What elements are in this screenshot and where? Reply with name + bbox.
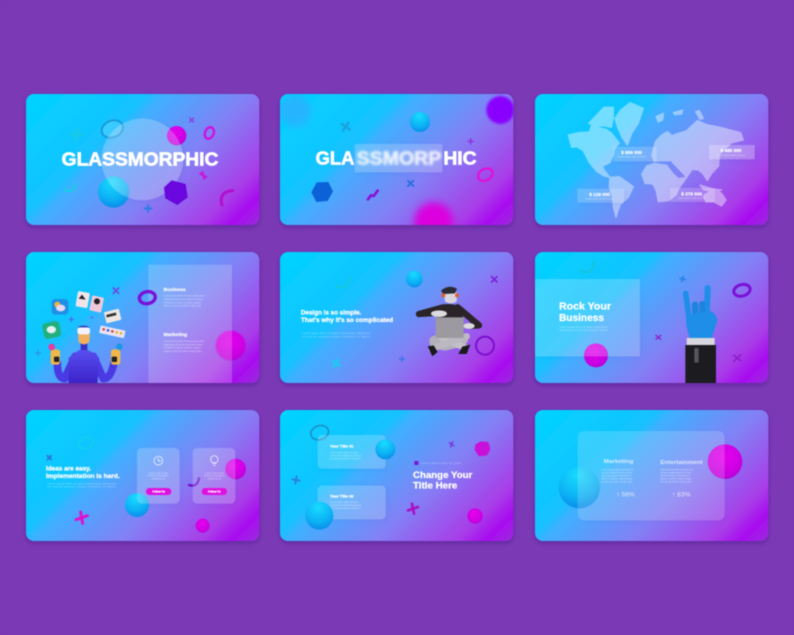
slide 8: change your title here bbox=[280, 410, 513, 541]
slide 9: marketing and entertainment stats bbox=[535, 410, 768, 541]
glass card 2: do eiusmod tempor incididunt bbox=[330, 507, 361, 510]
label: 128 000 bbox=[577, 189, 624, 203]
column: entertainment bbox=[660, 460, 703, 499]
eyebrow text: Lorem ipsum dolor sit amet bbox=[421, 462, 462, 465]
column: entertainment: labore et dolore magna aliqua bbox=[660, 477, 692, 480]
icon: magenta cross bbox=[408, 504, 418, 514]
slide 6: rock your business bbox=[535, 252, 768, 383]
glass card 2: consectetur adipiscing elit sed bbox=[330, 504, 362, 507]
glass card 2: Lorem ipsum dolor bbox=[205, 472, 224, 475]
ring top bbox=[99, 117, 126, 141]
slide background bbox=[535, 410, 768, 541]
text: business: aliqua ut enim ad minim veniam quis bbox=[164, 305, 202, 308]
icon: cyan plus bbox=[70, 128, 83, 141]
column: marketing bbox=[601, 459, 635, 499]
icon: purple square bullet bbox=[414, 461, 418, 465]
title text: GLA bbox=[316, 148, 354, 169]
icon: purple cross small bbox=[449, 442, 454, 447]
icon: cyan plus bbox=[330, 357, 342, 369]
title text: SSMORP bbox=[357, 148, 441, 169]
label: 856 000: $ 856 000 bbox=[621, 150, 642, 155]
glass card 1: do eiusmod tempor incididunt bbox=[330, 458, 361, 461]
body text bbox=[559, 326, 608, 332]
label: 485 000: $ 485 000 bbox=[721, 148, 742, 153]
slide background bbox=[26, 252, 259, 383]
label: 485 000 bbox=[709, 145, 755, 159]
column: marketing: sectetur adipiscing elit sed do bbox=[601, 471, 633, 474]
column: entertainment: sectetur adipiscing elit sed do bbox=[660, 471, 692, 474]
icon: blue plus bbox=[399, 356, 405, 362]
seated man figure bbox=[419, 287, 479, 356]
icon: blue plus bbox=[339, 120, 353, 134]
slide 2: blurred glass title bbox=[279, 94, 514, 241]
slide 5: design is so simple bbox=[280, 252, 513, 383]
glass card 1: Your Title 01 bbox=[330, 444, 354, 449]
text: marketing bbox=[164, 332, 205, 353]
glass card 2: Follow Us bbox=[208, 490, 221, 494]
cyan arc bbox=[581, 262, 594, 272]
icon: purple crosses bbox=[656, 335, 741, 361]
glass card 2: Your Title 02 bbox=[330, 493, 354, 498]
glass card 1: Lorem ipsum dolor sit amet bbox=[330, 452, 358, 455]
body text: elit sed do eiusmod tempor incididunt ut labore bbox=[47, 486, 116, 489]
heading: Rock Your bbox=[559, 301, 611, 312]
icon: blue plus bbox=[292, 476, 300, 484]
floating icons bbox=[42, 291, 125, 340]
column: entertainment: ut enim ad minim veniam quis bbox=[660, 480, 692, 483]
slide background bbox=[535, 252, 768, 383]
body text: Lorem ipsum dolor sit amet consectetur adipiscing bbox=[47, 482, 116, 485]
headline: That's why it's so complicated bbox=[301, 318, 393, 324]
purple arc bbox=[221, 191, 233, 205]
label: 128 000: Lorem ipsum dolor sit amet bbox=[586, 198, 614, 201]
glass card 2: Lorem ipsum dolor sit amet bbox=[330, 501, 358, 504]
icon: blue plus bbox=[679, 276, 686, 282]
label: 856 000 bbox=[613, 147, 657, 161]
glass card 2: sit amet consectetur bbox=[204, 475, 225, 478]
column: marketing: ut enim ad minim veniam quis bbox=[601, 480, 633, 483]
teal ring bbox=[309, 423, 330, 442]
purple squiggle bbox=[368, 191, 378, 199]
cyan ring bbox=[77, 436, 95, 450]
glass card 1: Lorem ipsum dolor bbox=[149, 472, 168, 475]
slide 1: glassmorphic title bbox=[26, 94, 259, 225]
label: 128 000: $ 128 000 bbox=[589, 192, 610, 197]
cyan arc bbox=[65, 184, 75, 191]
slide background bbox=[26, 94, 259, 225]
glass card 1 bbox=[137, 448, 180, 504]
glass card 2: adipiscing elit bbox=[207, 477, 222, 480]
headline bbox=[46, 467, 120, 480]
slide background bbox=[280, 252, 513, 383]
blue sphere left bbox=[305, 502, 333, 530]
label: 378 000: $ 378 000 bbox=[681, 191, 702, 196]
blue sphere bbox=[125, 493, 149, 517]
text: business bbox=[164, 287, 205, 308]
body text: elit sed do eiusmod tempor incididunt ut labore bbox=[302, 335, 371, 338]
slide 7: ideas are easy bbox=[26, 410, 259, 541]
icon: magenta cross bbox=[76, 512, 87, 523]
purple arc bbox=[189, 478, 199, 486]
icon: blue cross bbox=[408, 181, 413, 186]
text: marketing: adipiscing elit sed do eiusmod tempor bbox=[164, 343, 203, 346]
icon: small cross bbox=[190, 118, 194, 122]
headline bbox=[301, 311, 393, 324]
magenta sphere bbox=[584, 343, 608, 367]
slide background bbox=[535, 94, 768, 225]
body text: Lorem ipsum dolor sit amet consectetur bbox=[559, 326, 608, 329]
text: business: incididunt ut labore et dolore magna bbox=[164, 301, 201, 304]
icon: purple cross bbox=[492, 277, 497, 282]
text: business: Lorem ipsum dolor sit amet consectetur bbox=[164, 295, 205, 298]
magenta spheres bbox=[196, 459, 246, 533]
blue sphere bbox=[98, 176, 129, 208]
purple ring bbox=[732, 283, 752, 298]
magenta sphere bbox=[708, 444, 742, 479]
label: 856 000: Lorem ipsum dolor sit amet bbox=[618, 156, 646, 159]
juggler figure bbox=[48, 326, 123, 385]
rock hand with sleeve bbox=[685, 288, 717, 383]
magenta sphere bbox=[216, 331, 246, 361]
heading bbox=[559, 301, 611, 324]
title text: GLASSMORPHIC bbox=[62, 149, 218, 170]
label: 378 000 bbox=[670, 188, 715, 202]
heading: Business bbox=[559, 313, 604, 324]
glass card 1: consectetur adipiscing elit sed bbox=[330, 455, 362, 458]
column: marketing: labore et dolore magna aliqua bbox=[601, 477, 633, 480]
icon: small plus marks bbox=[35, 316, 93, 356]
glass card 1: Follow Us bbox=[152, 490, 165, 494]
glass card 2 bbox=[318, 486, 386, 519]
blurred blobs bbox=[280, 94, 514, 226]
magenta sphere bbox=[467, 508, 483, 524]
cyan arc bbox=[337, 278, 350, 288]
column: marketing: ↑ 56% bbox=[616, 492, 635, 499]
column: entertainment: ↑ 83% bbox=[672, 492, 691, 499]
glass card 1: sit amet consectetur bbox=[148, 475, 169, 478]
heading: Change Your bbox=[413, 470, 473, 480]
world map bbox=[568, 103, 743, 217]
glass circle bbox=[102, 119, 183, 200]
glass card 1: adipiscing elit bbox=[151, 477, 166, 480]
blue sphere bbox=[406, 271, 423, 287]
body text bbox=[302, 332, 371, 338]
title text bbox=[316, 148, 477, 169]
icon: magenta cross bbox=[200, 172, 206, 179]
cyan sphere bbox=[559, 467, 600, 508]
glass card 2 bbox=[193, 448, 235, 504]
magenta ring bbox=[203, 126, 216, 140]
blue sphere bbox=[410, 112, 430, 132]
heading bbox=[413, 470, 473, 490]
body text: Lorem ipsum dolor sit amet consectetur adipiscing bbox=[302, 332, 371, 335]
text: business: adipiscing elit sed do eiusmod tempor bbox=[164, 298, 203, 301]
slide background bbox=[26, 410, 259, 541]
slide background bbox=[280, 94, 513, 225]
icon: blue plus bbox=[145, 205, 151, 212]
purple hexagon bbox=[164, 180, 188, 205]
column: entertainment: Lorem ipsum dolor sit amet con bbox=[660, 468, 694, 471]
heading: Title Here bbox=[413, 480, 457, 490]
magenta ring bbox=[476, 166, 495, 183]
blue hexagon bbox=[311, 182, 333, 202]
headline: Implementation is hard. bbox=[46, 474, 120, 480]
glass panel bbox=[535, 279, 640, 356]
column: marketing: eiusmod tempor incididunt ut bbox=[601, 474, 631, 477]
column: marketing: Marketing bbox=[604, 459, 633, 465]
icon: purple cross bbox=[113, 288, 119, 293]
glass card 1 bbox=[318, 435, 386, 469]
column: marketing: Lorem ipsum dolor sit amet con bbox=[601, 468, 635, 471]
body text bbox=[47, 482, 116, 489]
title text: HIC bbox=[443, 148, 477, 169]
text: marketing: Lorem ipsum dolor sit amet consectetur bbox=[164, 340, 205, 343]
headline: Ideas are easy. bbox=[46, 467, 91, 473]
glass panel bbox=[578, 431, 725, 520]
magenta hexagon bbox=[475, 441, 490, 456]
glass panel bbox=[148, 265, 232, 383]
icon: small purple plus bbox=[468, 139, 473, 144]
label: 378 000: Lorem ipsum dolor sit amet bbox=[678, 197, 706, 200]
magenta circle bbox=[167, 126, 186, 145]
glass bar bbox=[355, 144, 442, 172]
text: marketing: incididunt ut labore et dolore magna bbox=[164, 347, 201, 350]
slide 4: juggler with glass panel bbox=[26, 252, 259, 385]
purple ring bbox=[476, 337, 494, 355]
label: 485 000: Lorem ipsum dolor sit amet bbox=[717, 154, 745, 157]
column: entertainment: eiusmod tempor incididunt ut bbox=[660, 474, 690, 477]
icon: blue cross bbox=[47, 456, 51, 460]
slide 3: world map bbox=[535, 94, 768, 225]
text: business: Business bbox=[164, 287, 186, 293]
text: marketing: aliqua ut enim ad minim veniam quis bbox=[164, 350, 202, 353]
text: marketing: Marketing bbox=[164, 332, 187, 338]
headline: Design is so simple. bbox=[301, 311, 362, 317]
purple ring bbox=[138, 290, 156, 305]
slide background bbox=[280, 410, 513, 541]
body text: adipiscing elit sed do eiusmod tempor bbox=[559, 329, 608, 332]
blue sphere right bbox=[375, 439, 395, 459]
column: entertainment: Entertainment bbox=[660, 460, 703, 466]
